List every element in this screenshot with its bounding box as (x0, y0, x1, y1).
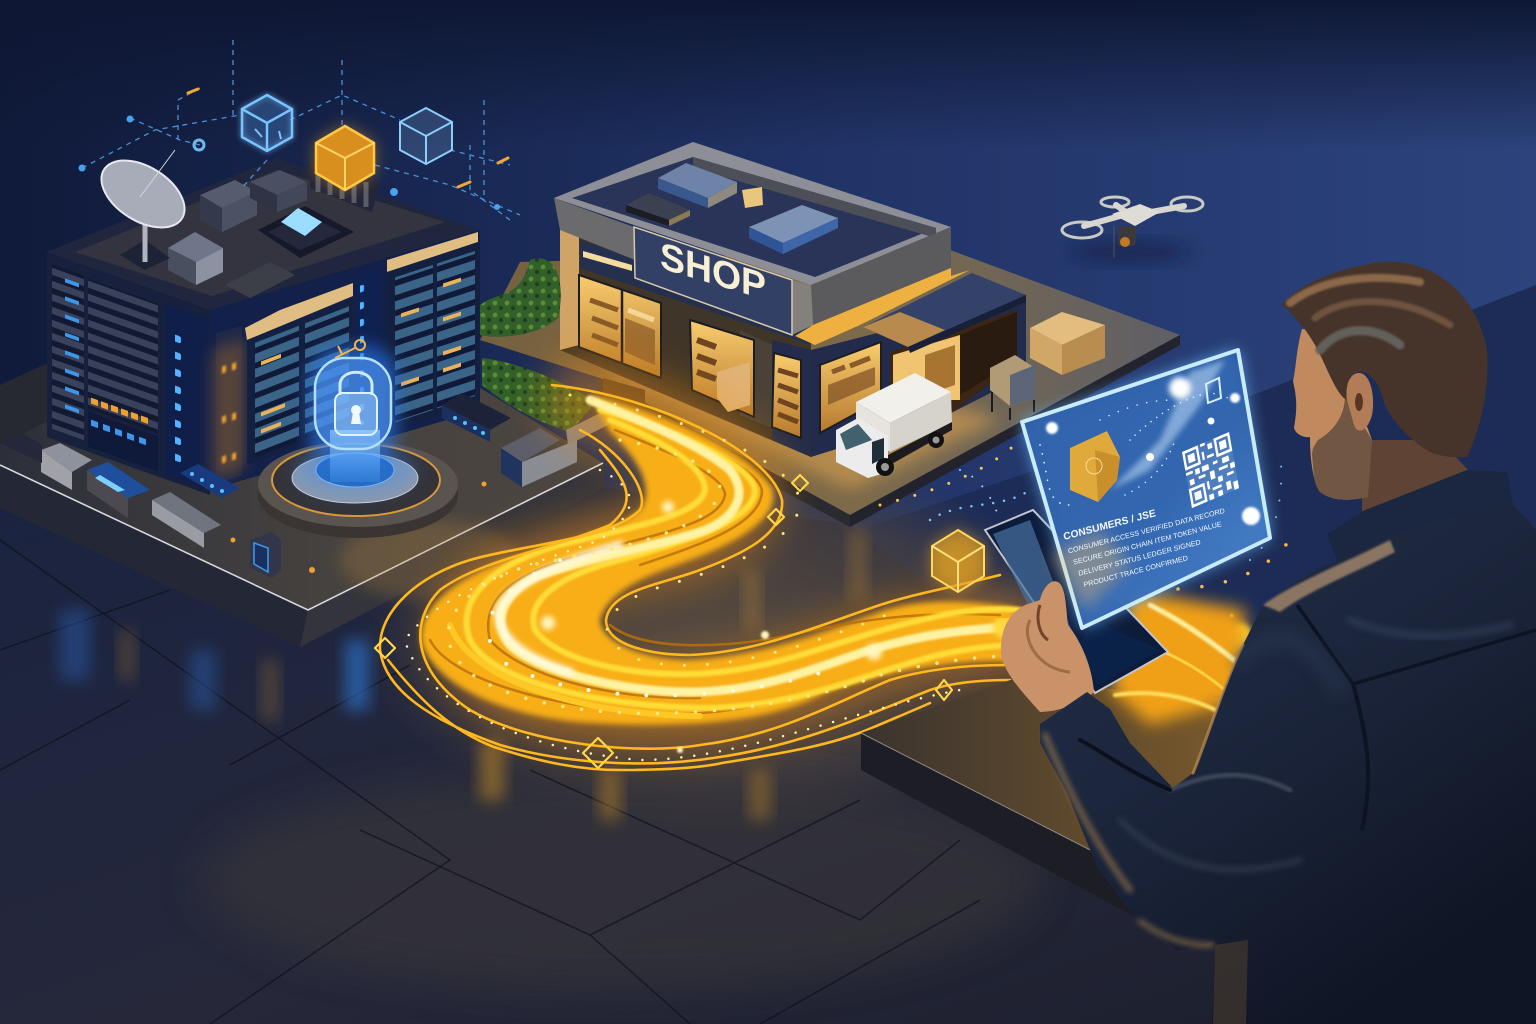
awning vent (603, 378, 645, 408)
shop door window (690, 320, 754, 417)
gold cube near tablet (932, 530, 984, 592)
cardboard boxes (1030, 312, 1105, 375)
neck (1362, 440, 1470, 520)
beard (1312, 395, 1372, 500)
roof unit 2 (626, 193, 690, 226)
server rack A (245, 283, 354, 465)
hair (1282, 262, 1488, 457)
blue cube right (400, 108, 452, 164)
shop front wall (560, 230, 811, 457)
ear (1347, 373, 1373, 431)
canopy (863, 273, 1026, 347)
sign text: SHOP (660, 235, 766, 309)
stream hot spots (541, 501, 882, 753)
edge box right (501, 428, 577, 487)
hand holding tablet (1001, 581, 1094, 712)
card lens flares (1046, 377, 1260, 525)
stream body (421, 395, 1015, 725)
stream edge threads (380, 385, 1010, 770)
pallet of goods (990, 355, 1035, 420)
stream bright lanes (450, 410, 1020, 716)
jacket hem (1213, 940, 1248, 1024)
shop narrow window (772, 353, 801, 438)
card text (1063, 491, 1232, 592)
roof equipment (168, 170, 354, 298)
blue LED unit (180, 464, 240, 498)
floor reflections (60, 530, 866, 820)
stream behind man (1110, 590, 1245, 725)
data center building (47, 158, 480, 495)
card text: CONSUMER ACCESS VERIFIED DATA RECORD (1067, 507, 1225, 555)
sparkles around card (880, 440, 1290, 590)
network lines (78, 40, 520, 220)
holographic lock (308, 340, 398, 482)
roof lamp (742, 187, 763, 208)
card text: CONSUMERS / JSE (1063, 508, 1157, 543)
card text: DELIVERY STATUS LEDGER SIGNED (1078, 538, 1201, 578)
golden data stream (375, 385, 1240, 770)
card specks (1040, 394, 1230, 505)
LED switch unit (442, 393, 511, 442)
holographic card (1022, 350, 1270, 628)
floor tiles (0, 450, 1536, 1024)
face (1293, 329, 1372, 500)
gold data links (188, 89, 508, 187)
grey unit left (41, 443, 92, 490)
stream particles (405, 395, 1240, 760)
card text: SECURE ORIGIN CHAIN ITEM TOKEN VALUE (1073, 520, 1222, 567)
lock key (335, 340, 365, 358)
jacket (1040, 470, 1536, 1024)
platform equipment (4, 393, 577, 578)
delivery truck (836, 373, 952, 478)
right wall (210, 230, 480, 490)
shop right wall (811, 295, 1026, 457)
jacket collar (1327, 470, 1513, 561)
shop left window (579, 251, 661, 378)
card text: PRODUCT TRACE CONFIRMED (1083, 554, 1188, 589)
small blue box (250, 532, 281, 578)
delivery drone (1062, 197, 1203, 262)
shop platform (480, 250, 1180, 527)
pedestal block (861, 590, 1245, 922)
server rack B (387, 232, 480, 432)
gold cube (316, 126, 374, 190)
data center platform (0, 362, 605, 647)
stream core (501, 400, 1010, 692)
stream dark lanes (430, 410, 1000, 714)
blue cube left (242, 95, 292, 151)
card icon (1206, 378, 1221, 403)
shop side bushes (480, 258, 561, 337)
left wall (47, 252, 210, 495)
lock body (335, 372, 377, 435)
hedge planter (482, 358, 608, 445)
shop building (554, 142, 1026, 457)
stream outer glow (477, 400, 1010, 705)
satellite dish (90, 147, 196, 270)
tablet (985, 510, 1168, 693)
gold badge (1070, 431, 1120, 502)
roof unit 3 (749, 205, 838, 254)
blue lit unit (87, 462, 150, 518)
shop sign (634, 227, 792, 335)
loading bay (890, 310, 1017, 413)
stream nodes (375, 475, 952, 768)
parapet (554, 142, 951, 285)
roof (47, 158, 480, 310)
lit shoulder (1263, 540, 1395, 612)
hair highlights (1290, 278, 1450, 350)
grey unit long (152, 492, 221, 548)
lock pedestal (258, 441, 458, 538)
QR code (1182, 432, 1239, 508)
sleeve highlights (1045, 620, 1510, 945)
roof unit 1 (658, 163, 737, 208)
shop right window (820, 342, 881, 433)
man (1040, 262, 1536, 1024)
jacket seams (1297, 605, 1536, 830)
